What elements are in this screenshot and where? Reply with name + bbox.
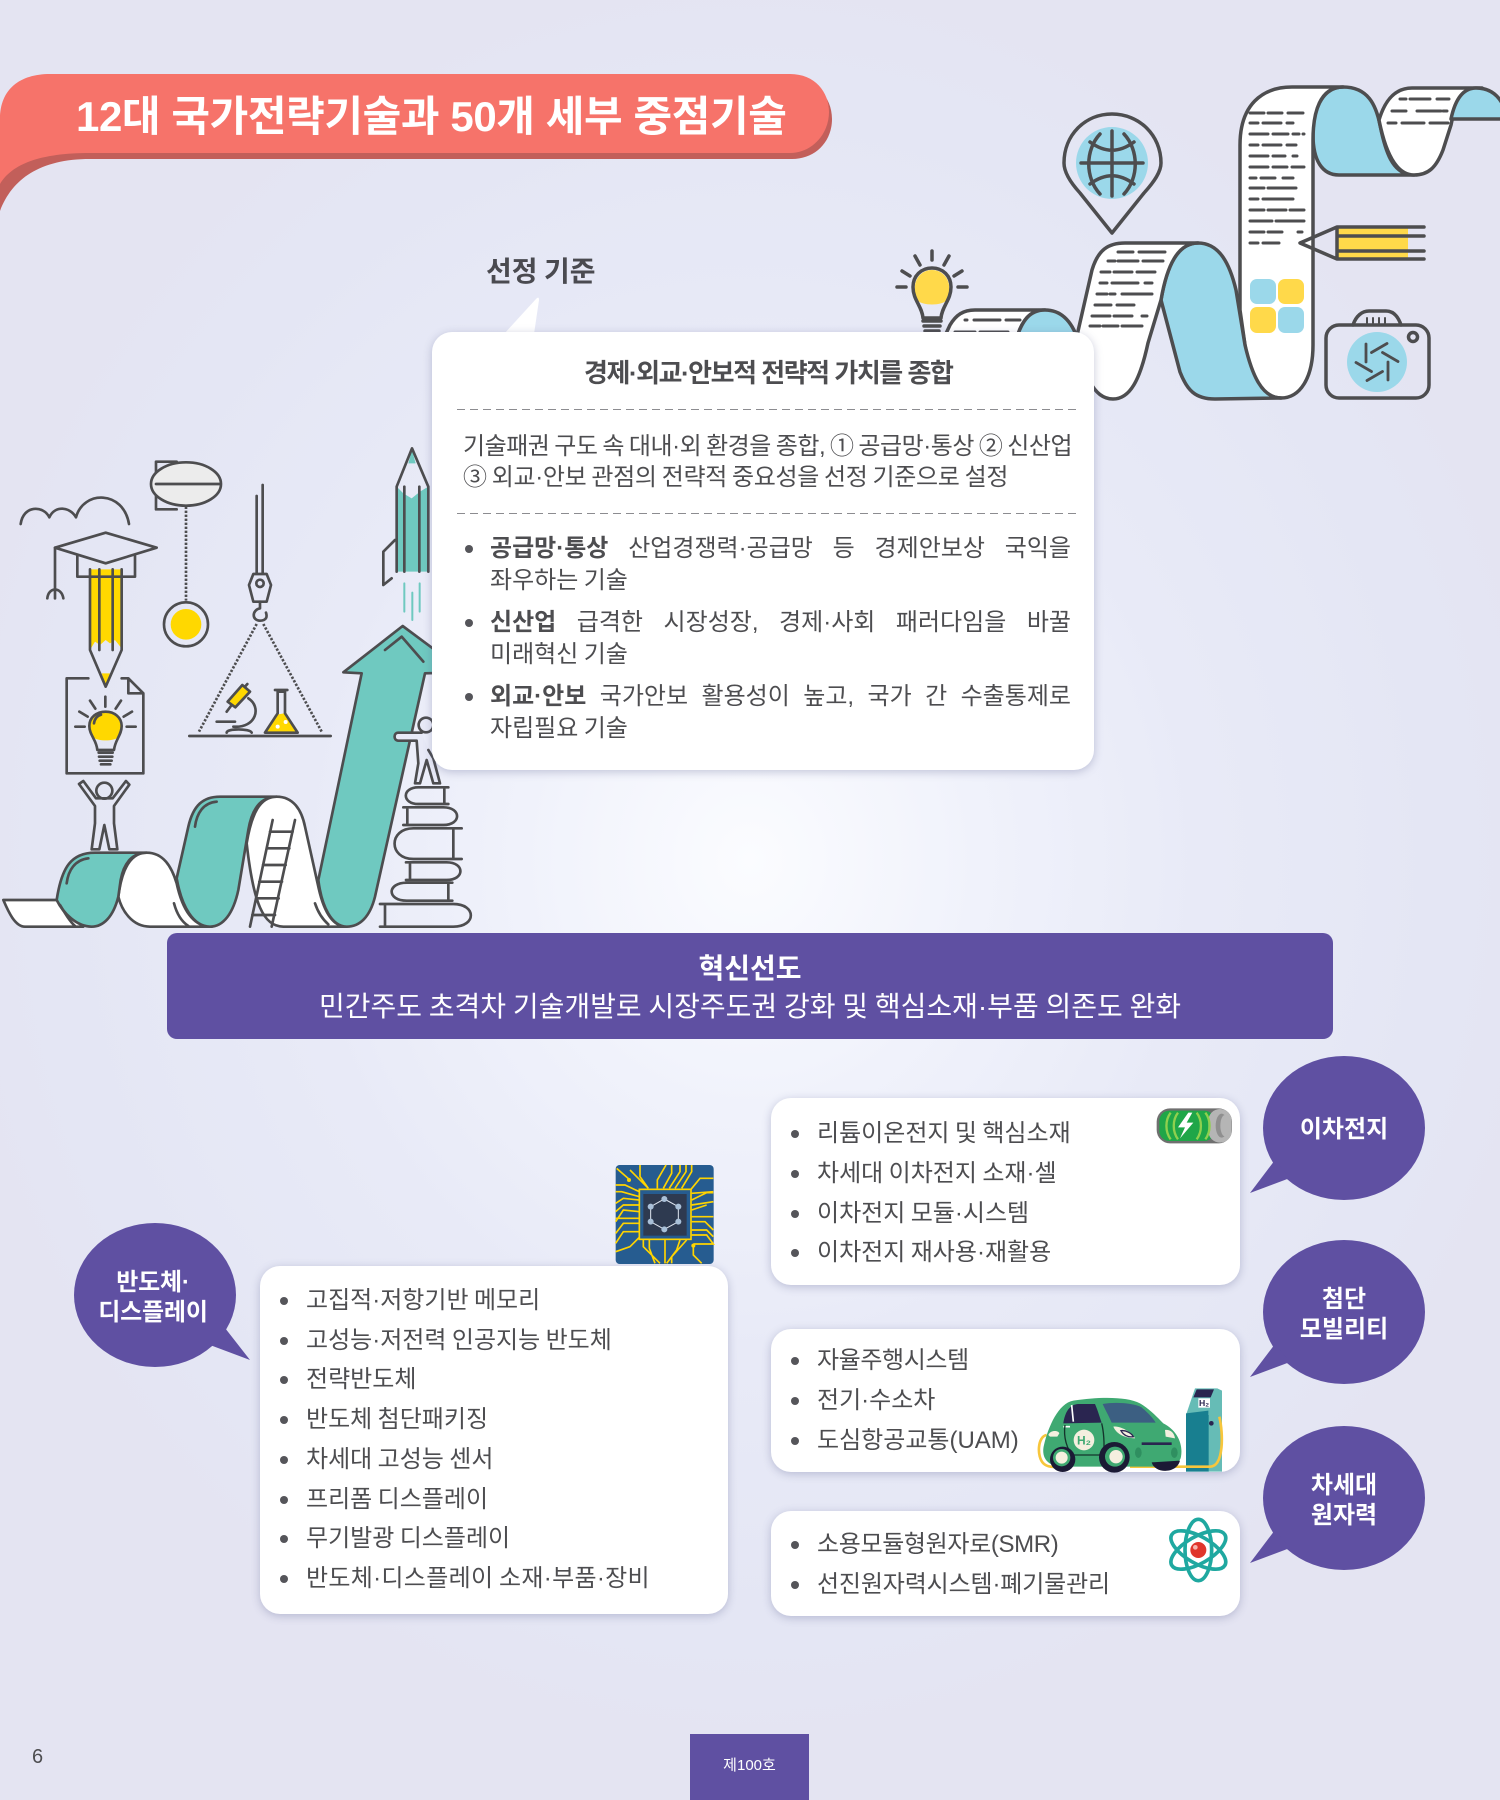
criterion: diplomacy and security: 외교·안보 국가안보 활용성이 높고, 국가 간 수출통제로 [490, 683, 1071, 710]
icon: graduation cap pencil [47, 533, 157, 687]
criteria description: 기술패권 구도 속 대내·외 환경을 종합, ① 공급망·통상 ② 신산업 [463, 433, 1072, 460]
icon: cloud line [21, 498, 129, 524]
panel: advanced mobility list [771, 1329, 1240, 1472]
icon: battery [1157, 1108, 1232, 1143]
panel: semiconductor and display list: 프리폼 디스플레이 [306, 1486, 488, 1513]
bubble label: advanced mobility: 모빌리티 [1300, 1316, 1388, 1343]
bubble label: advanced mobility [1300, 1286, 1388, 1343]
panel: semiconductor and display list: 반도체·디스플레이 소재·부품·장비 [306, 1565, 650, 1592]
icon: airship with ball [151, 462, 221, 646]
title text: 12대 국가전략기술과 50개 세부 중점기술 [76, 93, 787, 140]
criterion: new industry: 미래혁신 기술 [490, 641, 628, 668]
panel: semiconductor and display list: 고집적·저항기반 메모리 [306, 1287, 540, 1314]
banner heading: 혁신선도 [698, 953, 802, 984]
page number: 6 [32, 1746, 43, 1768]
bubble label: next generation nuclear: 원자력 [1311, 1502, 1377, 1529]
callout tail [506, 298, 539, 332]
icon: semiconductor chip [616, 1165, 714, 1264]
panel: secondary battery list: 이차전지 재사용·재활용 [817, 1239, 1051, 1266]
panel: next generation nuclear list: 선진원자력시스템·폐기물관리 [817, 1571, 1110, 1598]
icon: crane hook with lab shelf [189, 485, 331, 736]
criterion: diplomacy and security: 자립필요 기술 [490, 715, 628, 742]
panel: secondary battery list [771, 1098, 1240, 1285]
panel: advanced mobility list: 전기·수소차 [817, 1387, 935, 1414]
criterion: supply chain: 좌우하는 기술 [490, 567, 628, 594]
criterion: supply chain [465, 535, 1071, 594]
panel: advanced mobility list: 자율주행시스템 [817, 1347, 969, 1374]
icon: hydrogen car and charging pump: H₂ [1199, 1398, 1209, 1408]
icon: atom [1165, 1519, 1232, 1581]
banner description: 민간주도 초격차 기술개발로 시장주도권 강화 및 핵심소재·부품 의존도 완화 [319, 991, 1181, 1022]
panel: secondary battery list: 이차전지 모듈·시스템 [817, 1200, 1029, 1227]
panel heading: 경제·외교·안보적 전략적 가치를 종합 [584, 358, 952, 388]
panel: secondary battery list: 리튬이온전지 및 핵심소재 [817, 1120, 1071, 1147]
heading: selection criteria: 선정 기준 [486, 256, 596, 287]
icon: stacked books with person [380, 718, 471, 927]
bubble label: next generation nuclear: 차세대 [1311, 1472, 1377, 1499]
icon: globe map pin [1064, 114, 1161, 233]
bubble shape: semiconductor [74, 1223, 250, 1367]
criteria description: ③ 외교·안보 관점의 전략적 중요성을 선정 기준으로 설정 [463, 464, 1008, 491]
ribbon: text lines [955, 99, 1449, 332]
icon: rocket pencil [383, 448, 428, 620]
icon: person arms raised [79, 781, 129, 849]
bubble shape: nuclear [1250, 1426, 1425, 1570]
ribbon: teal and white waves [3, 626, 465, 927]
icon: light bulb [897, 251, 967, 331]
ribbon: colored tiles [1250, 279, 1304, 333]
title banner [0, 74, 832, 211]
bubble label: semiconductor and display [98, 1269, 208, 1326]
icon: hydrogen car and charging pump: H₂ [1077, 1433, 1091, 1447]
banner: innovation leadership [167, 933, 1333, 1039]
criterion: new industry [465, 609, 1071, 668]
icon: camera [1326, 311, 1429, 398]
icon: document with bulb [67, 678, 143, 773]
bubble shape: mobility [1250, 1240, 1425, 1384]
panel: semiconductor and display list: 무기발광 디스플레이 [306, 1525, 510, 1552]
panel: semiconductor and display list [260, 1266, 728, 1614]
bubble label: secondary battery: 이차전지 [1300, 1116, 1388, 1143]
panel: selection criteria [432, 332, 1094, 770]
bubble label: semiconductor and display: 디스플레이 [98, 1299, 208, 1326]
panel: advanced mobility list: 도심항공교통(UAM) [817, 1427, 1019, 1454]
panel: next generation nuclear list: 소용모듈형원자로(SMR) [817, 1531, 1058, 1558]
criteria description [463, 433, 1072, 491]
bubble label: next generation nuclear [1311, 1472, 1377, 1529]
criterion: diplomacy and security [465, 683, 1071, 742]
panel: semiconductor and display list: 고성능·저전력 인공지능 반도체 [306, 1327, 612, 1354]
bubble shape: battery [1250, 1056, 1425, 1200]
footer issue tab [690, 1734, 809, 1800]
criterion: supply chain: 공급망·통상 산업경쟁력·공급망 등 경제안보상 국익을 [490, 535, 1071, 562]
panel: semiconductor and display list: 전략반도체 [306, 1366, 416, 1393]
panel: semiconductor and display list: 차세대 고성능 센서 [306, 1446, 493, 1473]
footer issue tab: 제100호 [723, 1757, 776, 1774]
ribbon: paper strips [943, 87, 1500, 399]
icon: ladder [250, 820, 295, 927]
panel: secondary battery list: 차세대 이차전지 소재·셀 [817, 1160, 1057, 1187]
panel: semiconductor and display list: 반도체 첨단패키징 [306, 1406, 488, 1433]
bubble label: advanced mobility: 첨단 [1322, 1286, 1366, 1313]
panel: next generation nuclear list [771, 1511, 1240, 1616]
icon: pencil [1300, 227, 1424, 259]
icon: hydrogen car and charging pump [1039, 1388, 1222, 1473]
bubble label: semiconductor and display: 반도체· [116, 1269, 190, 1296]
criterion: new industry: 신산업 급격한 시장성장, 경제·사회 패러다임을 바꿀 [490, 609, 1071, 636]
